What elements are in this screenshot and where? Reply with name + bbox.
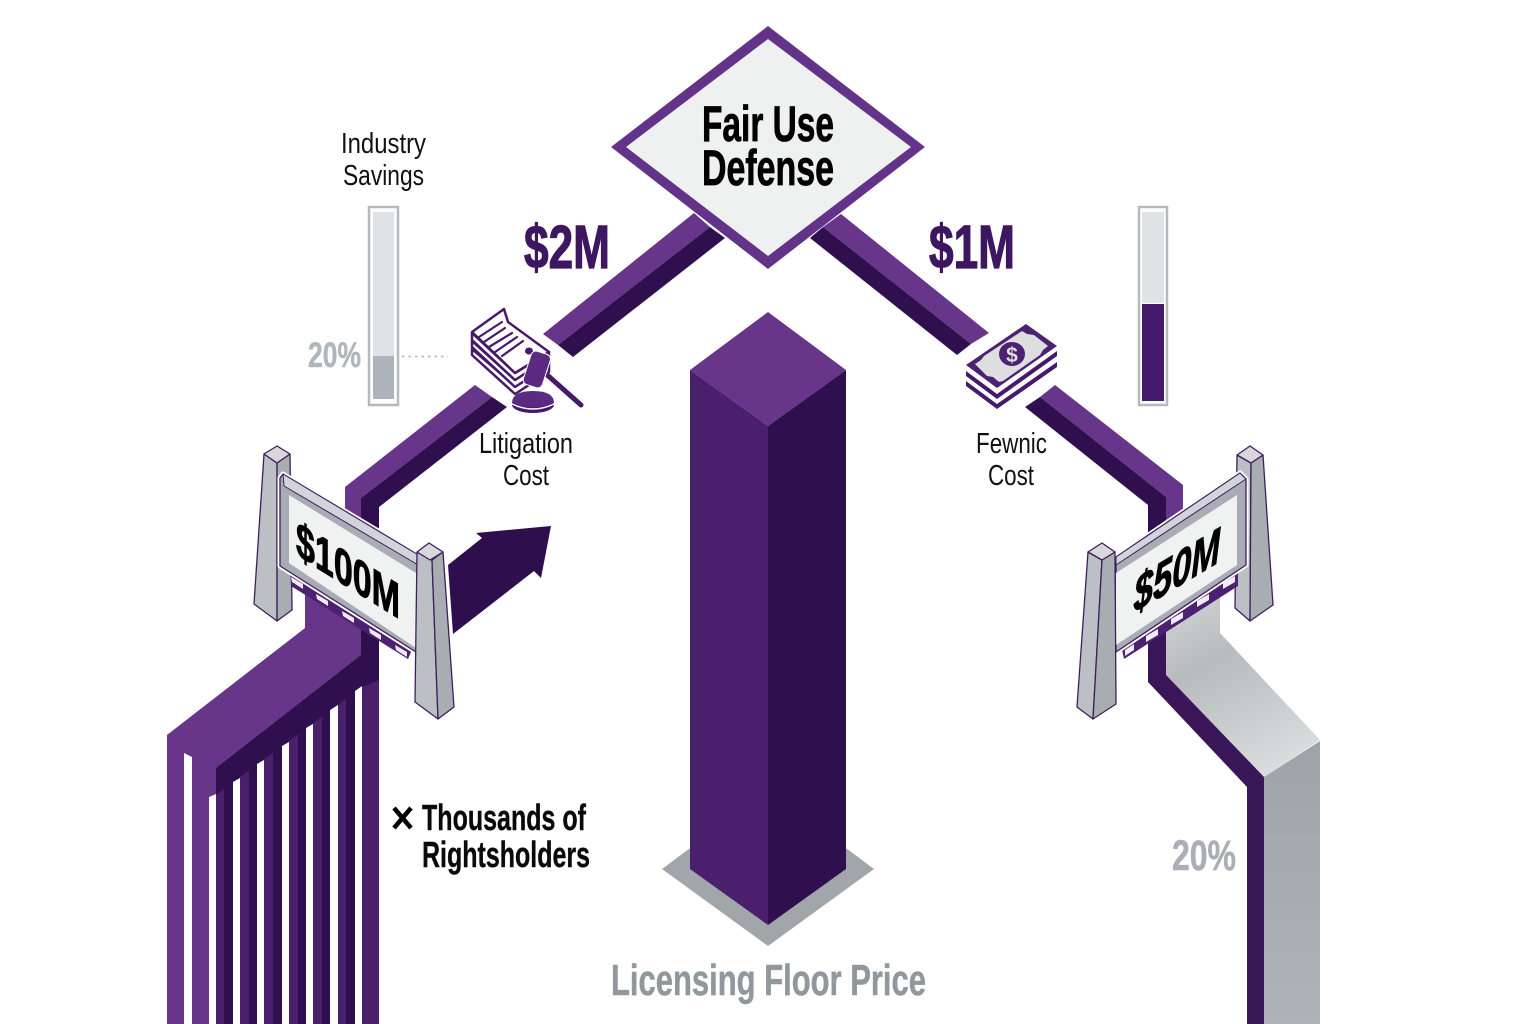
rear post	[1235, 446, 1273, 621]
tab strip	[1122, 566, 1238, 659]
label: Industry Savings: Industry	[341, 128, 426, 160]
sign value: $50M: $50M	[1133, 516, 1221, 624]
frame	[1116, 473, 1246, 652]
heading: Fair Use Defense	[702, 96, 834, 196]
label: Litigation Cost	[479, 428, 573, 492]
arrow: upward flow	[448, 526, 551, 634]
decision diamond: Fair Use Defense	[611, 26, 925, 269]
icon: stack of money: $	[1006, 344, 1018, 367]
sign value: $100M: $100M	[296, 510, 400, 630]
signboard: $50M	[1077, 446, 1273, 719]
left branching bars: thousands of rightsholders	[167, 595, 379, 1024]
left post	[254, 446, 292, 621]
icon: legal papers and gavel	[472, 309, 581, 413]
left path: upper beam from diamond	[543, 213, 725, 357]
frame	[280, 474, 420, 652]
icon: stack of money	[966, 324, 1057, 409]
callout: thousands of rightsholders: Thousands of	[422, 797, 587, 838]
front post	[1077, 543, 1116, 719]
right value label: 20%: 20%	[1172, 832, 1236, 880]
right gauge	[1139, 207, 1167, 405]
label: Litigation Cost: Cost	[503, 460, 549, 492]
left gauge: 20 percent savings	[369, 207, 448, 405]
central pillar: Licensing Floor Price	[662, 312, 874, 946]
label: Industry Savings: Savings	[343, 160, 424, 192]
heading: Fair Use Defense: Fair Use	[702, 96, 834, 152]
callout: thousands of rightsholders	[394, 797, 590, 875]
value label: $2M: $2M	[524, 213, 610, 281]
left path: lower beam	[345, 385, 507, 530]
right path: lower beam	[1025, 385, 1183, 545]
right gray path	[1148, 590, 1320, 1024]
right path: upper beam from diamond	[810, 214, 989, 355]
signboard: $100M	[254, 446, 454, 719]
icon: multiply sign	[394, 808, 411, 828]
label: Fewnic Cost: Cost	[988, 460, 1034, 492]
heading: Fair Use Defense: Defense	[702, 140, 834, 196]
label: Licensing Floor Price: Licensing Floor Price	[611, 956, 926, 1005]
right post	[415, 543, 454, 719]
tab strip	[290, 566, 414, 659]
left gauge value: 20%: 20%	[308, 336, 361, 375]
label: Fewnic Cost: Fewnic	[976, 428, 1047, 460]
callout: thousands of rightsholders: Rightsholders	[422, 834, 590, 875]
value label: $1M: $1M	[929, 213, 1015, 281]
label: Litigation Cost: Litigation	[479, 428, 573, 460]
label: Fewnic Cost	[976, 428, 1047, 492]
label: Industry Savings	[341, 128, 426, 192]
